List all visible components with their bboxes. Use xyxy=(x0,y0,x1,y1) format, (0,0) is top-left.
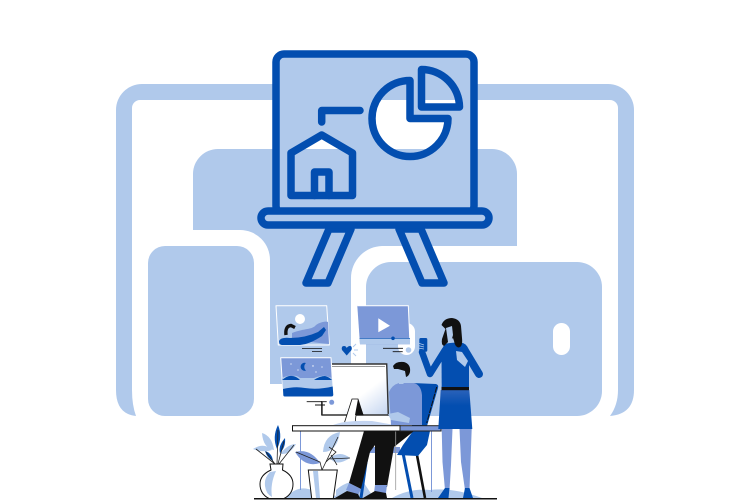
tablet block xyxy=(193,149,517,384)
video card xyxy=(357,306,411,353)
pie chart xyxy=(372,70,460,156)
presentation board icon xyxy=(261,54,489,283)
house icon xyxy=(291,135,352,196)
heart icon xyxy=(342,344,358,356)
photo card xyxy=(276,306,329,352)
plant in square pot xyxy=(295,432,350,498)
landscape phone xyxy=(366,262,602,416)
chair seat xyxy=(397,431,430,456)
chair back xyxy=(412,383,438,426)
seated man xyxy=(335,362,422,498)
connector line xyxy=(322,110,360,122)
phone button left xyxy=(398,323,415,355)
chair legs xyxy=(361,447,425,498)
ground mounds xyxy=(286,482,482,498)
monitor frame xyxy=(116,84,634,416)
standing woman xyxy=(418,318,479,498)
desk xyxy=(292,426,441,492)
board legs xyxy=(306,229,444,283)
infographic canvas xyxy=(116,50,634,500)
phone button right xyxy=(553,323,570,355)
ground line xyxy=(254,498,497,500)
background: device outlines xyxy=(116,84,634,416)
tray xyxy=(261,211,489,225)
board panel xyxy=(276,54,474,214)
night card xyxy=(281,358,334,415)
portrait phone xyxy=(148,246,254,416)
chair edge xyxy=(427,387,437,423)
monitor xyxy=(321,364,395,425)
plant in round vase xyxy=(253,425,296,498)
illustration: office scene xyxy=(253,306,497,500)
